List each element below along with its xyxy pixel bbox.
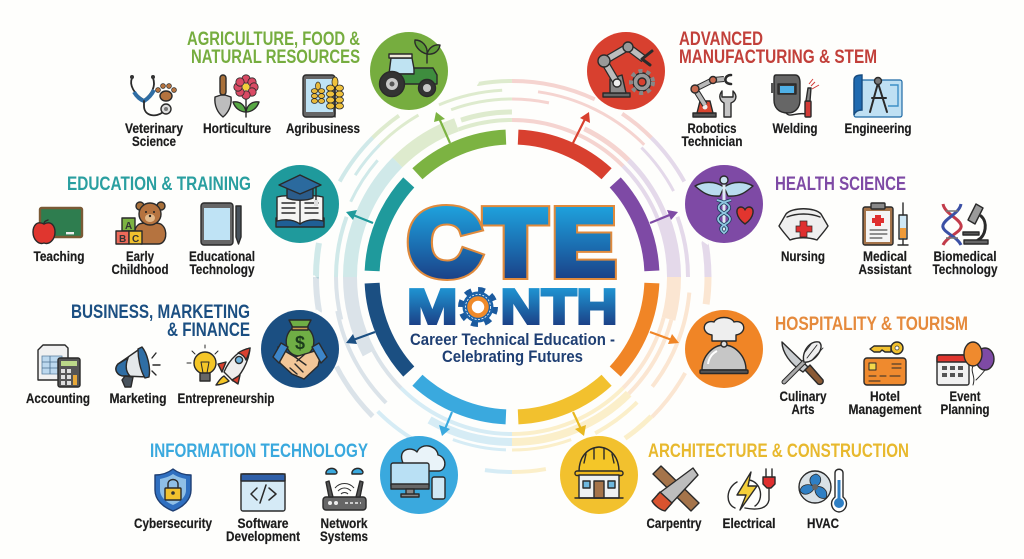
label: network systems: Systems <box>320 529 368 544</box>
icon: carpentry <box>652 466 699 511</box>
heading: business <box>71 302 250 341</box>
subtitle <box>410 330 615 366</box>
circle icon: business money and handshake: $ <box>295 333 305 353</box>
heading: health science: HEALTH SCIENCE <box>775 174 906 195</box>
icon: veterinary science <box>130 75 176 115</box>
heading: hospitality: HOSPITALITY & TOURISM <box>775 314 968 335</box>
label: nursing: Nursing <box>781 249 825 264</box>
label: culinary arts <box>780 389 827 417</box>
label: software development <box>226 516 300 544</box>
icon: early childhood: A <box>125 221 132 232</box>
circle icon: hospitality chef hat and cloche <box>685 310 763 388</box>
label: robotics technician <box>682 121 742 149</box>
panel: information technology <box>134 441 368 544</box>
CTE title: E <box>553 190 615 294</box>
CTE title: T <box>486 190 546 294</box>
panel: advanced manufacturing <box>679 29 912 149</box>
circle icon: construction hard hat house <box>560 436 638 514</box>
MONTH wordmark with gear <box>407 280 618 334</box>
icon: network systems <box>323 468 366 510</box>
circle icon: manufacturing robot arm <box>587 32 665 110</box>
label: biomedical technology: Technology <box>932 262 998 277</box>
CTE title: C <box>408 190 480 294</box>
circle icon: business money and handshake <box>261 310 339 388</box>
label: medical assistant: Medical <box>863 249 907 264</box>
heading: agriculture: NATURAL RESOURCES <box>191 47 360 68</box>
label: event planning: Planning <box>940 402 990 417</box>
panel: hospitality and tourism <box>775 314 994 417</box>
label: event planning: Event <box>950 389 981 404</box>
icon: entrepreneurship <box>187 345 250 385</box>
label: veterinary science <box>125 121 183 149</box>
label: robotics technician: Robotics <box>688 121 736 136</box>
icon: robotics technician <box>691 75 736 117</box>
circle icon: education book and cap <box>261 165 339 243</box>
label: event planning <box>940 389 990 417</box>
MONTH wordmark with gear: M <box>407 280 458 334</box>
icon: welding <box>771 75 819 117</box>
label: network systems: Network <box>320 516 368 531</box>
circle icon: health caduceus <box>685 165 763 243</box>
label: horticulture: Horticulture <box>203 121 271 136</box>
circle icon: agriculture tractor <box>370 32 448 110</box>
icon: software development <box>241 474 285 511</box>
label: welding: Welding <box>772 121 818 136</box>
icon: marketing <box>116 347 160 387</box>
icon: electrical <box>728 469 775 510</box>
subtitle: Celebrating Futures <box>442 347 583 366</box>
label: culinary arts: Culinary <box>780 389 827 404</box>
label: hotel management: Hotel <box>870 389 900 404</box>
CTE title: E <box>553 190 615 294</box>
icon: educational technology <box>201 203 241 245</box>
label: educational technology: Technology <box>190 262 255 277</box>
heading: architecture: ARCHITECTURE & CONSTRUCTION <box>648 441 909 462</box>
subtitle: Career Technical Education - <box>410 330 615 349</box>
label: agribusiness: Agribusiness <box>286 121 360 136</box>
icon: hvac <box>799 469 846 512</box>
icon: cybersecurity <box>155 469 191 511</box>
label: network systems <box>320 516 368 544</box>
heading: advanced manufacturing: ADVANCED <box>679 29 763 50</box>
heading: agriculture: AGRICULTURE, FOOD & <box>187 29 360 50</box>
CTE title: C <box>408 190 480 294</box>
icon: early childhood: B <box>119 234 126 245</box>
label: software development: Software <box>238 516 289 531</box>
CTE title: T <box>486 190 546 294</box>
icon: early childhood <box>116 202 166 245</box>
heading: business: BUSINESS, MARKETING <box>71 302 250 323</box>
icon: culinary arts <box>782 342 823 384</box>
label: educational technology: Educational <box>189 249 255 264</box>
label: carpentry: Carpentry <box>646 516 702 531</box>
label: cybersecurity: Cybersecurity <box>134 516 212 531</box>
label: hvac: HVAC <box>807 516 839 531</box>
label: hotel management: Management <box>848 402 922 417</box>
label: biomedical technology: Biomedical <box>934 249 996 264</box>
icon: biomedical technology <box>943 204 988 245</box>
icon: agribusiness <box>303 75 344 117</box>
label: medical assistant <box>858 249 912 277</box>
label: engineering: Engineering <box>844 121 912 136</box>
label: software development: Development <box>226 529 300 544</box>
icon: horticulture <box>215 75 259 117</box>
label: veterinary science: Science <box>132 134 176 149</box>
heading: information technology: INFORMATION TECHNOLOGY <box>150 441 368 462</box>
central ring segments <box>314 79 710 475</box>
arrows from ring to career circles <box>346 112 679 436</box>
panel: health science <box>775 174 998 277</box>
label: teaching: Teaching <box>34 249 84 264</box>
label: accounting: Accounting <box>26 391 90 406</box>
label: culinary arts: Arts <box>792 402 814 417</box>
MONTH wordmark with gear: NTH <box>500 280 618 334</box>
label: robotics technician: Technician <box>682 134 742 149</box>
icon: engineering <box>854 75 902 117</box>
heading: education: EDUCATION & TRAINING <box>67 174 251 195</box>
icon: hotel management <box>864 342 906 385</box>
label: early childhood: Early <box>126 249 154 264</box>
pale decorative rings <box>233 0 791 556</box>
heading: agriculture <box>187 29 360 68</box>
CTE title <box>407 190 618 366</box>
label: entrepreneurship: Entrepreneurship <box>178 391 274 406</box>
icon: early childhood: C <box>132 234 139 245</box>
label: biomedical technology <box>932 249 998 277</box>
label: early childhood: Childhood <box>112 262 168 277</box>
heading: advanced manufacturing: MANUFACTURING & STEM <box>679 47 877 68</box>
label: hotel management <box>848 389 922 417</box>
panel: architecture and construction <box>646 441 909 531</box>
label: veterinary science: Veterinary <box>125 121 183 136</box>
icon: teaching <box>33 208 82 243</box>
panel: business marketing finance <box>26 302 274 406</box>
panel: agriculture <box>125 29 360 149</box>
label: marketing: Marketing <box>110 391 166 406</box>
icon: medical assistant <box>863 203 908 245</box>
icon: nursing <box>779 209 828 240</box>
panel: education and training <box>33 174 255 277</box>
label: educational technology <box>189 249 255 277</box>
heading: business: & FINANCE <box>167 320 250 341</box>
heading: advanced manufacturing <box>679 29 877 68</box>
label: early childhood <box>112 249 168 277</box>
label: electrical: Electrical <box>722 516 776 531</box>
circle icon: IT cloud and devices <box>380 436 458 514</box>
icon: accounting <box>38 345 80 387</box>
icon: event planning <box>937 342 994 385</box>
label: medical assistant: Assistant <box>858 262 912 277</box>
